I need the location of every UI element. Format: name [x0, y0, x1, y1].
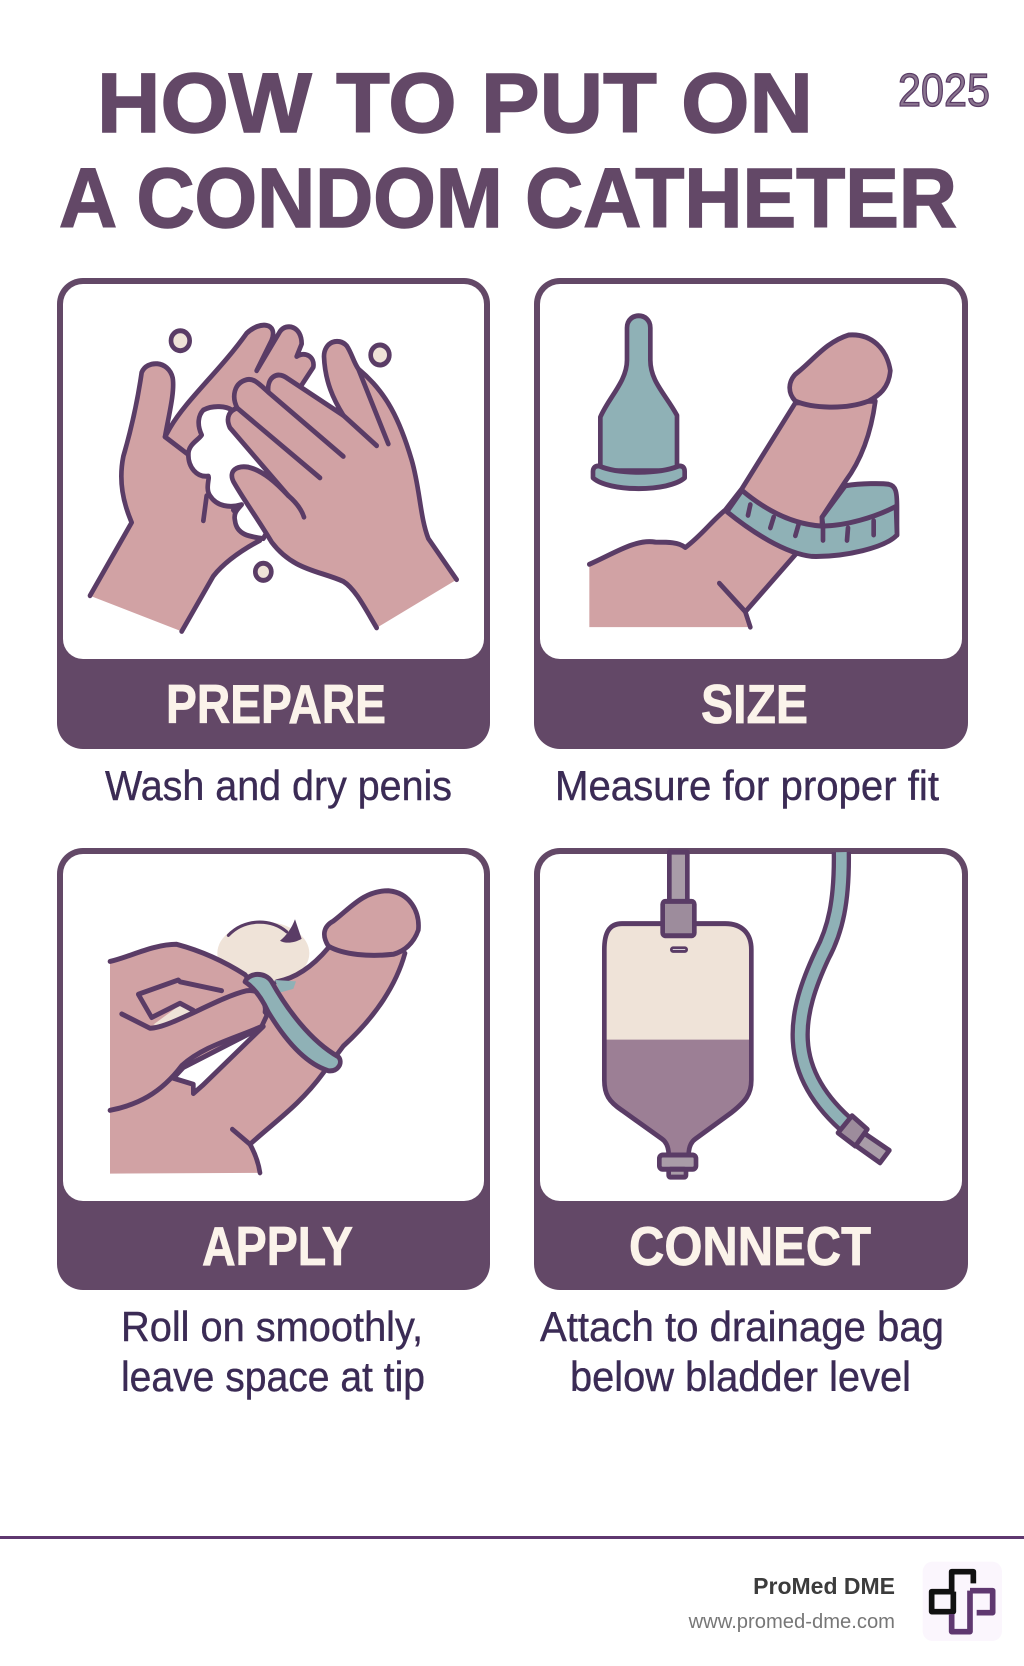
caption: connect: below bladder level: [570, 1353, 911, 1400]
footer brand text: www.promed-dme.com: [688, 1611, 895, 1633]
anatomy head: [324, 891, 419, 955]
tube connector: [838, 1116, 889, 1163]
icon: rolling on the catheter: [110, 891, 419, 1174]
rolled ring: [245, 974, 340, 1071]
title: [59, 56, 957, 245]
card frame: apply: [57, 848, 490, 1290]
measuring tape front: [727, 490, 897, 556]
right hand: [228, 341, 457, 628]
card frame: prepare: [57, 278, 490, 749]
panel: prepare: [57, 278, 490, 809]
panel: connect: [534, 848, 968, 1400]
icon: catheter and measuring tape: [589, 316, 897, 627]
panel: size: [534, 278, 968, 809]
icon: drainage bag and tube: [604, 852, 889, 1177]
caption: prepare: Wash and dry penis: [105, 762, 452, 809]
anatomy head: [790, 335, 890, 407]
bag outlet cap: [659, 1155, 696, 1177]
label: connect: CONNECT: [629, 1215, 871, 1277]
drainage bag: [604, 924, 751, 1155]
caption: apply: Roll on smoothly,: [121, 1303, 423, 1350]
footer brand text: ProMed DME: [753, 1573, 895, 1599]
tape back loop: [822, 484, 897, 546]
icon: washing hands: [90, 325, 457, 631]
title: A CONDOM CATHETER: [59, 151, 957, 245]
hand gripping sheath: [110, 944, 267, 1110]
label: apply: APPLY: [202, 1215, 353, 1277]
catheter tube: [800, 852, 850, 1128]
caption: apply: leave space at tip: [121, 1353, 425, 1400]
catheter sheath: [593, 316, 685, 489]
anatomy outline: [589, 401, 875, 627]
caption: size: Measure for proper fit: [555, 762, 939, 809]
year label: 2025: [898, 64, 990, 116]
anatomy fill: [110, 948, 405, 1174]
cream highlight: [217, 922, 309, 985]
anatomy fill: [589, 510, 752, 627]
footer brand text: [688, 1573, 895, 1633]
caption: connect: [540, 1303, 944, 1400]
soap foam: [188, 407, 287, 539]
card frame: size: [534, 278, 968, 749]
card frame: connect: [534, 848, 968, 1290]
caption: apply: [121, 1303, 425, 1400]
bag inlet tube: [669, 852, 687, 902]
label: prepare: PREPARE: [166, 673, 386, 735]
tape ticks: [748, 505, 874, 540]
bag clamp: [663, 901, 694, 936]
title: HOW TO PUT ON: [97, 56, 813, 150]
rotation arrow: [228, 919, 302, 943]
panel: apply: [57, 848, 490, 1400]
label: size: SIZE: [701, 673, 808, 735]
soap bubbles: [171, 331, 389, 580]
anatomy outline: [250, 948, 405, 1173]
footer logo: [923, 1562, 1002, 1641]
caption: connect: Attach to drainage bag: [540, 1303, 944, 1350]
left hand: [90, 325, 314, 631]
